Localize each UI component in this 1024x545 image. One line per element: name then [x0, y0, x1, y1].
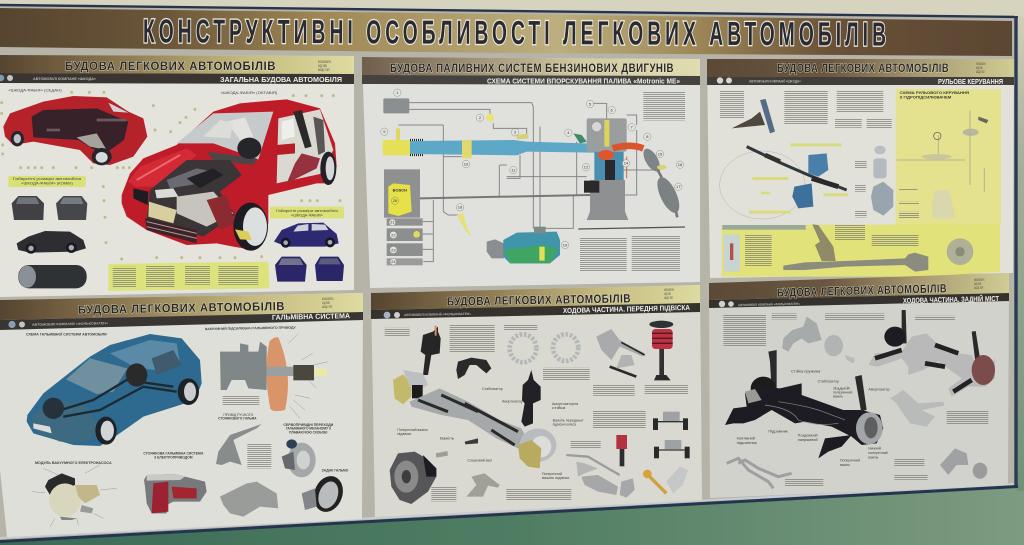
- component numbers: 5: [589, 101, 592, 106]
- grey kombi views: [12, 196, 87, 288]
- panel: front suspension: [371, 285, 702, 517]
- component numbers: 17: [676, 184, 681, 189]
- label markers: [2, 92, 340, 259]
- intake pipe: [410, 140, 601, 155]
- component numbers: 18: [458, 205, 463, 210]
- scheme subtitle: З ГІДРОПІДСИЛЮВАЧЕМ: [900, 96, 951, 100]
- main axle labels: Стабілізатор: [818, 379, 839, 383]
- panel: steering: ШКОДА, ТВАТ: [976, 70, 984, 74]
- text blocks: [385, 324, 688, 501]
- component numbers: 23: [391, 247, 396, 252]
- sensor: vacuum: [486, 114, 494, 122]
- callout: hatchback dimensions: Габаритні розміри автомобіля: [276, 209, 338, 213]
- rear axle diagrams: [723, 310, 995, 488]
- assembly labels: підвіски колеса: [553, 423, 576, 427]
- bushing bracket: [466, 473, 500, 497]
- subheading: ГАЛЬМІВНА СИСТЕМА: [272, 311, 350, 322]
- panel: steering: [707, 59, 1014, 278]
- panel: front suspension: ФОЛЬКСВАГЕН,: [664, 288, 690, 292]
- title band: [0, 8, 1012, 56]
- sedan caption: «ШКОДА-ФАБІЯ» (СЕДАН): [8, 89, 62, 93]
- callout: kombi dimensions: «ШКОДА-ФАБІЯ» (КОМБІ): [21, 182, 73, 186]
- component numbers: 21: [390, 220, 395, 225]
- assembly labels: Поперечний важіль: [397, 428, 428, 432]
- brand note: АУДІ, БМВ,: [318, 64, 327, 68]
- electric parking brake: [143, 451, 207, 513]
- power steering assembly: [720, 147, 847, 219]
- component numbers: 9: [383, 129, 386, 134]
- rear arm detail: [890, 390, 944, 427]
- small red strut: [616, 435, 627, 466]
- component numbers: 7: [631, 125, 634, 130]
- handbrake: СТОЯНКОВОГО ГАЛЬМА: [218, 417, 257, 421]
- main axle labels: Стійка пружина: [791, 370, 820, 374]
- component numbers: 24: [391, 259, 396, 264]
- component numbers: 2: [479, 115, 482, 120]
- assembly labels: важіль підвіски: [542, 476, 569, 480]
- callout tags: [749, 143, 848, 214]
- component numbers: 22: [391, 232, 396, 237]
- brand note: АУДІ, БМВ,: [322, 301, 330, 305]
- assembly labels: Важіль: [440, 436, 454, 440]
- main axle labels: Підрамник: [768, 429, 788, 433]
- steering diagrams: [720, 89, 1001, 277]
- component numbers: 12: [584, 165, 589, 170]
- main axle labels: важіль: [868, 455, 879, 459]
- assembly labels: Амортизаторна: [552, 402, 578, 406]
- main axle labels: підшипник: [737, 441, 757, 445]
- front suspension diagrams: [385, 321, 690, 504]
- logos: [717, 77, 732, 84]
- subheading: СХЕМА СИСТЕМИ ВПОРСКУВАННЯ ПАЛИВА «Motronic ME»: [487, 76, 680, 85]
- main axle labels: Натяжний: [737, 437, 755, 441]
- hub disc: [390, 451, 448, 504]
- panel: steering: ФОЛЬКСВАГЕН,: [976, 62, 1002, 66]
- diagram: Motronic injection scheme: [381, 89, 685, 272]
- subheading: ЗАГАЛЬНА БУДОВА АВТОМОБІЛЯ: [220, 75, 342, 84]
- yellow panel: hydraulic scheme: [896, 89, 1001, 225]
- control unit rack: [384, 169, 423, 265]
- strip caption: АВТОМОБІЛІ КОМПАНІЇ «ФОЛЬКСВАГЕН»: [404, 312, 471, 317]
- handbrake: ПРИВІД РУЧНОГО: [223, 413, 254, 417]
- subheading: ХОДОВА ЧАСТИНА. ЗАДНІЙ МІСТ: [903, 294, 1000, 305]
- bearing diagrams: [510, 334, 578, 362]
- panel: general car structure: [0, 55, 354, 297]
- assembly labels: Важіль передньої: [553, 419, 583, 423]
- text blocks: [723, 313, 988, 487]
- ball joint: [643, 467, 688, 493]
- exhaust: [613, 146, 684, 217]
- callout: parts legend: [108, 262, 269, 291]
- vacuum booster: [220, 337, 327, 411]
- logos: [0, 75, 13, 81]
- air pump: [383, 98, 409, 113]
- component numbers: [381, 89, 684, 265]
- main axle labels: поперечний: [868, 451, 888, 455]
- booster caption: ВАКУУМНИЙ ПІДСИЛЮВАЧ ГАЛЬМІВНОГО ПРИВОДУ: [205, 326, 297, 331]
- rear brake: [302, 469, 349, 516]
- control arm: [596, 329, 645, 377]
- engine: [584, 118, 628, 220]
- brand note: АУДІ, БМВ,: [976, 66, 983, 70]
- main axle labels: Поперечний: [840, 459, 860, 463]
- assembly labels: Стабілізатор: [482, 387, 503, 391]
- disc brake: floating caliper: ГАЛЬМІВНОГО МЕХАНІЗМУ З: [286, 427, 331, 431]
- main axle labels: Задній: [833, 387, 850, 391]
- blue hatchback views: [274, 223, 344, 282]
- text blocks: [720, 90, 892, 128]
- component numbers: 19: [563, 242, 568, 247]
- assembly labels: [397, 387, 583, 480]
- heading: БУДОВА ЛЕГКОВИХ АВТОМОБІЛІВ: [65, 59, 276, 73]
- throttle: [462, 140, 472, 158]
- assembly labels: Поперечний: [542, 472, 562, 476]
- red coil strut: [649, 321, 673, 380]
- component numbers: 1: [396, 90, 399, 95]
- main axle labels: важіль: [840, 463, 850, 467]
- panel: rear axle: [709, 273, 1009, 498]
- handbrake: [216, 413, 271, 468]
- component numbers: 20: [393, 198, 398, 203]
- strip caption: АВТОМОБІЛІ КОМПАНІЇ «ФОЛЬКСВАГЕН»: [32, 321, 108, 327]
- logos: [384, 312, 400, 318]
- hatchback caption: «ШКОДА-ФАБІЯ» (ОКТАВІЯ): [221, 91, 277, 95]
- main axle labels: Поздовжній: [798, 434, 818, 438]
- component numbers: 10: [464, 161, 469, 166]
- bus line: [420, 195, 590, 198]
- component numbers: 14: [624, 161, 629, 166]
- main rear axle: [725, 350, 883, 458]
- assembly labels: підвіски: [397, 432, 411, 436]
- panel: rear axle: ШКОДА, ТВАТ: [974, 286, 983, 290]
- strip caption: АВТОМОБІЛІ КОМПАНІЇ «ШКОДА»: [749, 80, 801, 84]
- heading: БУДОВА ЛЕГКОВИХ АВТОМОБІЛІВ: [777, 281, 947, 300]
- subheading: ХОДОВА ЧАСТИНА. ПЕРЕДНЯ ПІДВІСКА: [563, 303, 690, 315]
- valve parts: [855, 146, 893, 217]
- connecting lines: [398, 103, 660, 262]
- logos: [8, 321, 25, 328]
- callout: hatchback dimensions: [270, 207, 344, 218]
- small wheel views: [653, 412, 690, 458]
- hub exploded view: [940, 448, 987, 479]
- ignition sensor: [457, 213, 472, 236]
- callout: hatchback dimensions: «ШКОДА-ФАБІЯ»: [291, 214, 323, 218]
- sensor: injector: [517, 133, 587, 143]
- system caption: СХЕМА ГАЛЬМІВНОЇ СИСТЕМИ АВТОМОБІЛЯ: [26, 332, 107, 336]
- main axle labels: Нижній: [868, 447, 881, 451]
- control unit rack: BOSCH: [393, 188, 407, 193]
- main axle labels: [737, 370, 890, 467]
- panel: braking system: [0, 293, 363, 537]
- red hatchback cutaway: [122, 99, 337, 251]
- scheme title: СХЕМА РУЛЬОВОГО КЕРУВАННЯ: [900, 91, 969, 95]
- strip caption: АВТОМОБІЛІ КОМПАНІЇ «ШКОДА»: [33, 77, 96, 81]
- illustrations: Skoda cars: [2, 89, 344, 291]
- description text and legends: [578, 92, 685, 272]
- component numbers: 3: [514, 130, 517, 135]
- electric parking brake: СТОЯНКОВА ГАЛЬМІВНА СИСТЕМА: [143, 451, 204, 455]
- component numbers: 8: [646, 134, 649, 139]
- component numbers: 11: [511, 167, 516, 172]
- booster labels: [223, 333, 328, 418]
- heading: БУДОВА ЛЕГКОВИХ АВТОМОБІЛІВ: [447, 291, 631, 309]
- fuel tank: [487, 227, 560, 263]
- main axle assembly: [393, 326, 556, 468]
- electric parking brake: З ЕЛЕКТРОПРИВОДОМ: [154, 455, 193, 459]
- electric pump module: [32, 461, 117, 527]
- disc brake: floating caliper: [282, 423, 334, 477]
- assembly labels: стійка: [552, 406, 566, 410]
- electric pump module: МОДУЛЬ ВАКУУМНОГО ЕЛЕКТРОНАСОСА: [35, 461, 112, 465]
- brand note: ШКОДА, ТВАТ: [322, 305, 332, 309]
- panel: fuel systems: [362, 57, 700, 288]
- main axle labels: важіль: [833, 395, 843, 399]
- panel: front suspension: ШКОДА, ТВАТ: [664, 296, 673, 300]
- brand note: АУДІ, БМВ,: [974, 282, 981, 286]
- heading: БУДОВА ЛЕГКОВИХ АВТОМОБІЛІВ: [777, 61, 949, 75]
- subheading: РУЛЬОВЕ КЕРУВАННЯ: [938, 77, 1003, 86]
- callout: kombi dimensions: Габаритні розміри автомобіля: [13, 177, 81, 181]
- brand note: ФОЛЬКСВАГЕН,: [318, 60, 344, 64]
- logos: [719, 301, 734, 307]
- torsion beam: [727, 458, 792, 488]
- component numbers: 15: [658, 151, 663, 156]
- main axle labels: напрямний: [798, 438, 818, 442]
- handbrake cables: [220, 482, 278, 517]
- black rear axle top: [868, 310, 995, 397]
- panel: braking system: ФОЛЬКСВАГЕН,: [322, 297, 348, 301]
- brand note: ШКОДА, ТВАТ: [318, 68, 330, 72]
- knuckle: black part: [456, 358, 491, 379]
- brake diagrams: [26, 326, 349, 527]
- rear brake: ЗАДНЄ ГАЛЬМО: [322, 469, 349, 473]
- brand note: АУДІ, БМВ,: [664, 292, 671, 296]
- steering column: [732, 99, 775, 133]
- disc brake: floating caliper: СЕРВОПРИВІДНІ ПЕРЕХОДИ: [283, 423, 334, 427]
- hub carrier: [782, 317, 855, 363]
- panel: rear axle: ФОЛЬКСВАГЕН,: [974, 277, 1000, 282]
- main axle labels: поперечний: [833, 391, 852, 395]
- component numbers: 6: [611, 107, 614, 112]
- callout: kombi dimensions: [8, 176, 86, 187]
- component numbers: 4: [567, 130, 570, 135]
- assembly labels: Сошковий вал: [467, 459, 492, 463]
- component numbers: 16: [678, 162, 683, 167]
- stabilizer bar: [566, 455, 635, 498]
- red sedan: [3, 96, 147, 165]
- blue car: [27, 334, 202, 446]
- assembly labels: Амортизатор: [502, 399, 523, 403]
- heading: БУДОВА ПАЛИВНИХ СИСТЕМ БЕНЗИНОВИХ ДВИГУНІВ: [390, 61, 674, 75]
- strip caption: АВТОМОБІЛІ КОМПАНІЇ «ФОЛЬКСВАГЕН»: [738, 302, 800, 307]
- disc brake: floating caliper: ПЛАВАЮЧОЮ СКОБОЮ: [289, 430, 328, 434]
- main axle labels: Амортизатор: [868, 388, 890, 392]
- air filter: [383, 128, 423, 155]
- yellow panel: rack and pinion: [722, 224, 1000, 277]
- heading: БУДОВА ЛЕГКОВИХ АВТОМОБІЛІВ: [78, 299, 285, 317]
